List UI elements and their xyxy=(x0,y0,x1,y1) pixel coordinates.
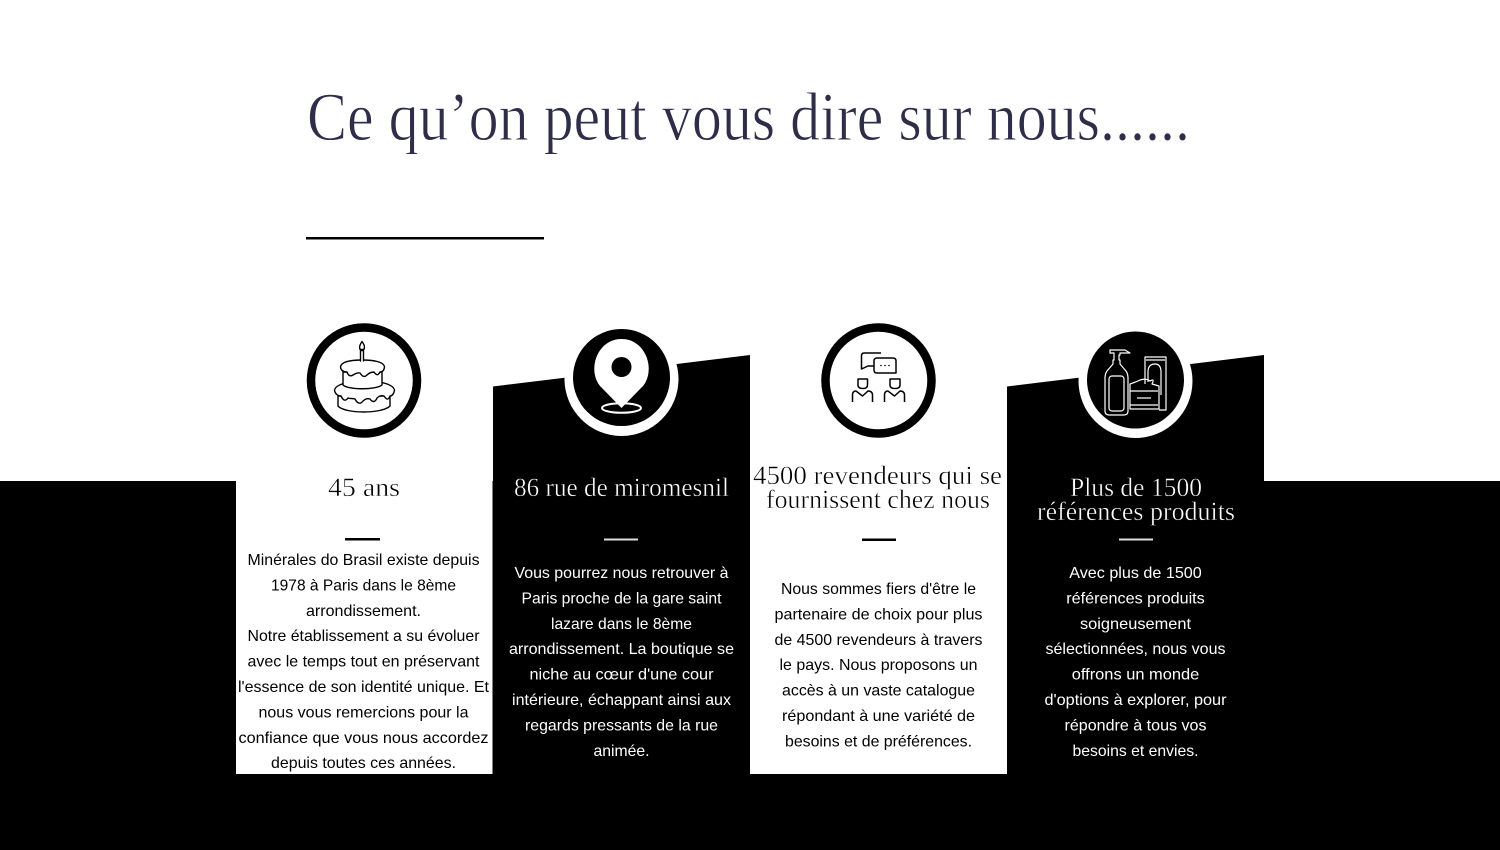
icon: birthday cake xyxy=(311,328,417,434)
heading 4: références produits xyxy=(1037,497,1235,526)
text block 1: avec le temps tout en préservant xyxy=(248,654,480,671)
text block 1: Minérales do Brasil existe depuis xyxy=(248,552,480,569)
text block 1: depuis toutes ces années. xyxy=(271,755,456,772)
text block 4: références produits xyxy=(1066,590,1205,607)
divider 3 xyxy=(862,538,896,541)
text block 3: Nous sommes fiers d'être le xyxy=(781,581,976,598)
heading 4: Plus de 1500 xyxy=(1070,473,1202,502)
panel: 45 ans xyxy=(236,328,492,774)
text block 2 xyxy=(509,565,734,760)
title: Ce qu’on peut vous dire sur nous...... xyxy=(307,79,1190,155)
text block 2: lazare dans le 8ème xyxy=(551,616,692,633)
text block 3 xyxy=(774,581,982,750)
icon: location pin xyxy=(564,322,678,436)
title underline xyxy=(306,237,544,240)
text block 4 xyxy=(1044,565,1227,760)
text block 3: le pays. Nous proposons un xyxy=(780,657,978,674)
text block 1: nous vous remercions pour la xyxy=(258,704,469,721)
text block 3: répondant à une variété de xyxy=(782,708,975,725)
black lower band xyxy=(0,481,1500,850)
text block 1: l'essence de son identité unique. Et xyxy=(238,679,490,696)
text block 2: Vous pourrez nous retrouver à xyxy=(514,565,729,582)
text block 4: sélectionnées, nous vous xyxy=(1046,641,1226,658)
text block 1 xyxy=(238,552,490,772)
text block 3: partenaire de choix pour plus xyxy=(774,606,982,623)
text block 2: animée. xyxy=(594,743,650,760)
divider 4 xyxy=(1119,538,1153,540)
heading 3 xyxy=(753,461,1002,514)
text block 4: soigneusement xyxy=(1080,616,1192,633)
text block 2: arrondissement. La boutique se xyxy=(509,641,734,658)
heading 1: 45 ans xyxy=(328,473,400,502)
panel background 4 xyxy=(1007,355,1264,774)
heading 3: 4500 revendeurs qui se xyxy=(753,461,1002,490)
text block 3: de 4500 revendeurs à travers xyxy=(774,632,982,649)
icon: cosmetic products xyxy=(1078,324,1192,438)
text block 4: offrons un monde xyxy=(1072,667,1199,684)
panel background 1 xyxy=(236,481,492,774)
heading 4 xyxy=(1037,473,1235,526)
text block 1: arrondissement. xyxy=(306,603,421,620)
text block 2: niche au cœur d'une cour xyxy=(530,667,714,684)
heading 2: 86 rue de miromesnil xyxy=(514,473,729,502)
panel: adresse xyxy=(493,322,750,774)
panel background 2 xyxy=(493,355,750,774)
text block 4: Avec plus de 1500 xyxy=(1069,565,1202,582)
text block 4: besoins et envies. xyxy=(1072,743,1198,760)
panel: produits xyxy=(1007,324,1264,774)
panel background 3 xyxy=(750,481,1007,774)
divider 2 xyxy=(604,538,638,540)
icon: people talking xyxy=(826,328,932,434)
text block 3: accès à un vaste catalogue xyxy=(782,683,975,700)
text block 2: regards pressants de la rue xyxy=(525,717,718,734)
text block 1: 1978 à Paris dans le 8ème xyxy=(271,577,456,594)
text block 4: d'options à explorer, pour xyxy=(1044,692,1227,709)
text block 1: Notre établissement a su évoluer xyxy=(248,628,480,645)
text block 2: Paris proche de la gare saint xyxy=(522,590,722,607)
text block 4: répondre à tous vos xyxy=(1064,717,1206,734)
text block 2: intérieure, échappant ainsi aux xyxy=(512,692,731,709)
text block 3: besoins et de préférences. xyxy=(785,733,972,750)
divider 1 xyxy=(345,538,380,540)
panel: revendeurs xyxy=(750,328,1007,774)
text block 1: confiance que vous nous accordez xyxy=(238,730,488,747)
heading 3: fournissent chez nous xyxy=(766,485,990,514)
